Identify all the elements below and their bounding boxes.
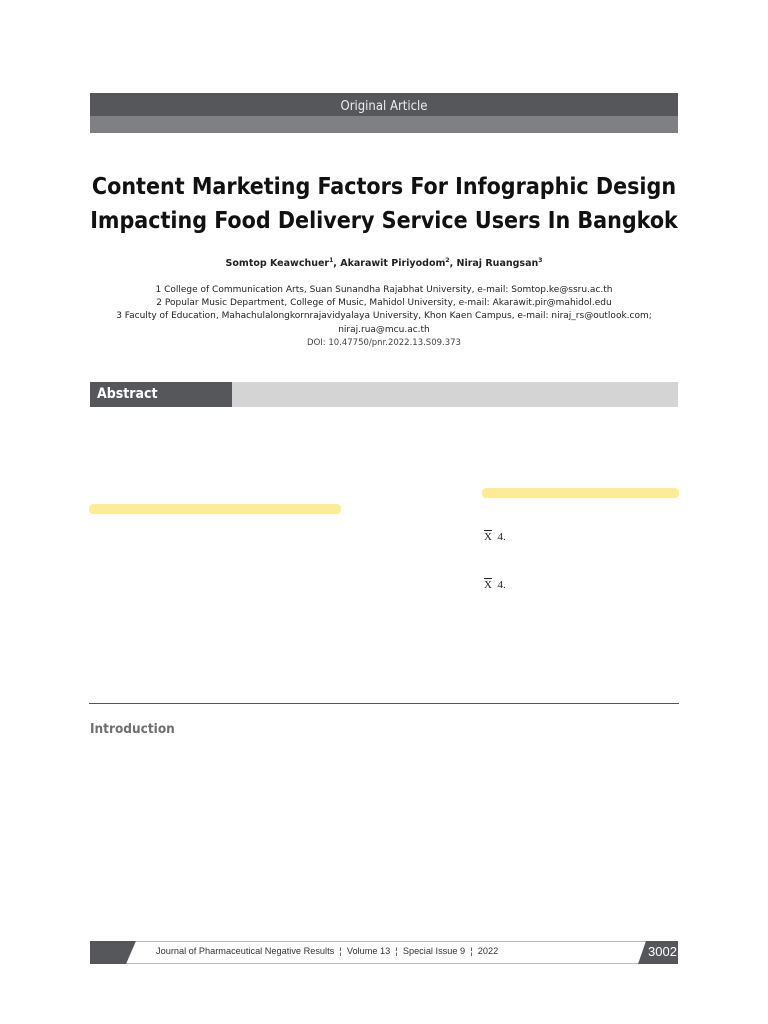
page number: 3002 (648, 944, 677, 959)
abstract label (90, 382, 232, 407)
footer band (90, 941, 678, 964)
affiliations (116, 285, 652, 348)
title (90, 174, 678, 234)
title: Content Marketing Factors For Infographic Design (92, 174, 676, 200)
mean value 2: X 4. (484, 579, 506, 591)
authors: Somtop Keawchuer1, Akarawit Piriyodom2, Niraj Ruangsan3 (226, 257, 542, 269)
affiliations: 1 College of Communication Arts, Suan Sunandha Rajabhat University, e-mail: Somtop.ke@ssru.ac.th (155, 285, 612, 295)
affiliations: 3 Faculty of Education, Mahachulalongkornrajavidyalaya University, Khon Kaen Campus, e-mail: niraj_rs@outlook.com; (116, 311, 652, 321)
highlight bar right (482, 488, 679, 498)
affiliations: DOI: 10.47750/pnr.2022.13.S09.373 (307, 338, 461, 348)
header band: Original Article (90, 93, 678, 133)
title: Impacting Food Delivery Service Users In Bangkok (90, 208, 678, 234)
header label: Original Article (340, 99, 428, 114)
affiliations: 2 Popular Music Department, College of Music, Mahidol University, e-mail: Akarawit.pir@mahidol.edu (156, 298, 612, 308)
abstract header bar (90, 382, 678, 407)
affiliations: niraj.rua@mcu.ac.th (338, 325, 430, 335)
footer journal text: Journal of Pharmaceutical Negative Results ¦ Volume 13 ¦ Special Issue 9 ¦ 2022 (156, 946, 498, 956)
divider line (89, 703, 679, 704)
introduction heading: Introduction (90, 721, 175, 737)
mean value 1: X 4. (484, 531, 506, 543)
highlight bar left (89, 504, 341, 514)
abstract label: Abstract (97, 386, 157, 402)
